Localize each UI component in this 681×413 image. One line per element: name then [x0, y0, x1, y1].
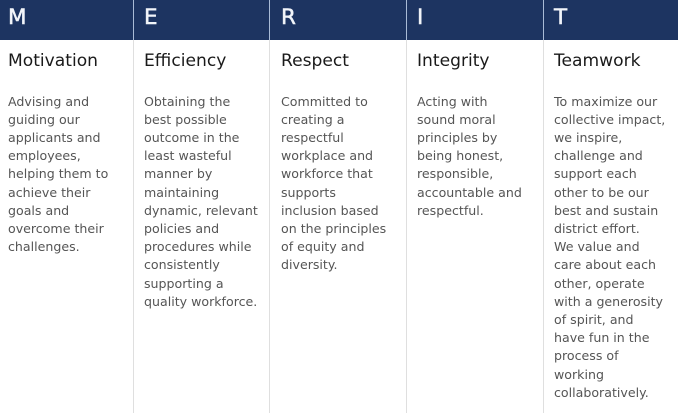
letter R: R	[281, 5, 296, 30]
text: Teamwork description: we inspire,	[554, 130, 622, 145]
text: Efficiency description: manner by	[144, 166, 212, 181]
heading: Teamwork: Teamwork	[554, 51, 641, 71]
text: Efficiency description: maintaining	[144, 185, 219, 200]
text: Respect description: inclusion based	[281, 203, 379, 218]
text: Teamwork description: other, operate	[554, 276, 645, 291]
panel: Integrity	[417, 5, 522, 218]
text: Respect description: on the principles	[281, 221, 386, 236]
text: Teamwork description: challenge and	[554, 148, 643, 163]
text: Motivation description: guiding our	[8, 112, 80, 127]
text: Teamwork description: To maximize our	[554, 94, 657, 109]
text: Motivation description: applicants and	[8, 130, 101, 145]
text: Teamwork description: other to be our	[554, 185, 649, 200]
text: Efficiency description: procedures while	[144, 239, 252, 254]
text: Efficiency description: Obtaining the	[144, 94, 230, 109]
text: Respect description: Committed to	[281, 94, 368, 109]
text: Efficiency description: best possible	[144, 112, 227, 127]
text: Efficiency description: supporting a	[144, 276, 224, 291]
text: Teamwork description: support each	[554, 166, 637, 181]
text: Motivation description: helping them to	[8, 166, 108, 181]
text: Respect description: of equity and	[281, 239, 364, 254]
text: Integrity description: being honest,	[417, 148, 503, 163]
text: Teamwork description: working	[554, 367, 604, 382]
text: Efficiency description: quality workforce.	[144, 294, 257, 309]
text: Efficiency description: policies and	[144, 221, 219, 236]
header band	[0, 0, 678, 40]
text: Respect description: diversity.	[281, 257, 338, 272]
text: Integrity description: Acting with	[417, 94, 487, 109]
text: Respect description	[281, 94, 386, 272]
text: Integrity description: responsible,	[417, 166, 493, 181]
text: Efficiency description	[144, 94, 258, 309]
panel: Respect	[281, 5, 386, 272]
text: Respect description: supports	[281, 185, 336, 200]
text: Teamwork description: have fun in the	[554, 330, 649, 345]
text: Teamwork description: care about each	[554, 257, 656, 272]
text: Integrity description: respectful.	[417, 203, 484, 218]
text: Efficiency description: dynamic, relevant	[144, 203, 258, 218]
letter E: E	[144, 5, 158, 30]
panel: Motivation	[8, 5, 108, 254]
text: Integrity description: sound moral	[417, 112, 496, 127]
text: Respect description: workforce that	[281, 166, 373, 181]
letter I: I	[417, 5, 423, 30]
text: Integrity description: accountable and	[417, 185, 522, 200]
text: Teamwork description	[554, 94, 665, 400]
heading: Integrity: Integrity	[417, 51, 490, 71]
letter T: T	[554, 5, 567, 30]
text: Respect description: creating a	[281, 112, 344, 127]
text: Teamwork description: best and sustain	[554, 203, 658, 218]
letter M: M	[8, 5, 27, 30]
text: Integrity description: principles by	[417, 130, 497, 145]
text: Motivation description: employees,	[8, 148, 81, 163]
text: Motivation description: overcome their	[8, 221, 104, 236]
heading: Efficiency: Efficiency	[144, 51, 226, 71]
panel: Efficiency	[144, 5, 258, 309]
text: Teamwork description: collective impact,	[554, 112, 665, 127]
text: Teamwork description: collaboratively.	[554, 385, 649, 400]
text: Teamwork description: district effort.	[554, 221, 640, 236]
text: Teamwork description: of spirit, and	[554, 312, 634, 327]
text: Respect description: workplace and	[281, 148, 373, 163]
text: Efficiency description: consistently	[144, 257, 220, 272]
text: Motivation description	[8, 94, 108, 254]
heading: Motivation: Motivation	[8, 51, 98, 71]
text: Teamwork description: process of	[554, 348, 619, 363]
text: Teamwork description: with a generosity	[554, 294, 663, 309]
text: Motivation description: challenges.	[8, 239, 80, 254]
text: Respect description: respectful	[281, 130, 344, 145]
heading: Respect: Respect	[281, 51, 349, 71]
text: Efficiency description: least wasteful	[144, 148, 232, 163]
text: Teamwork description: We value and	[554, 239, 640, 254]
text: Motivation description: goals and	[8, 203, 69, 218]
panel: Teamwork	[554, 5, 665, 400]
text: Motivation description: achieve their	[8, 185, 90, 200]
text: Motivation description: Advising and	[8, 94, 89, 109]
text: Efficiency description: outcome in the	[144, 130, 239, 145]
text: Integrity description	[417, 94, 522, 218]
